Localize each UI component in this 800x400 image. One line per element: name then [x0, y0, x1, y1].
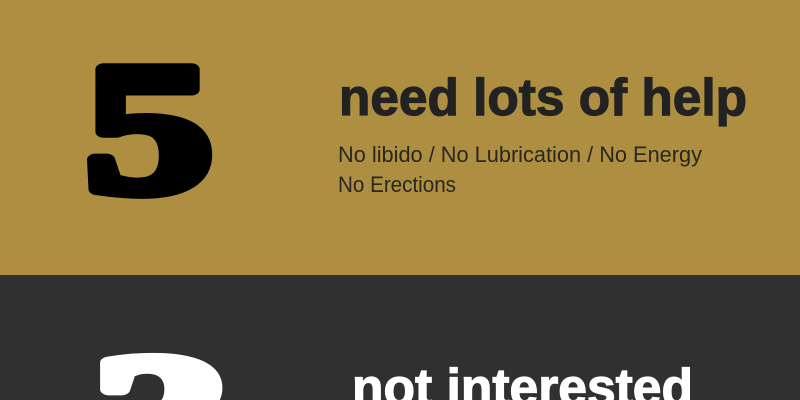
panel: not interested [0, 275, 800, 400]
number 5: 5 [85, 26, 213, 232]
heading: need lots of help: need lots of help [339, 69, 747, 127]
panel: need lots of help [0, 0, 800, 275]
description line 1: No libido / No Lubrication / No Energy [338, 142, 702, 167]
description line 2: No Erections [338, 172, 456, 197]
